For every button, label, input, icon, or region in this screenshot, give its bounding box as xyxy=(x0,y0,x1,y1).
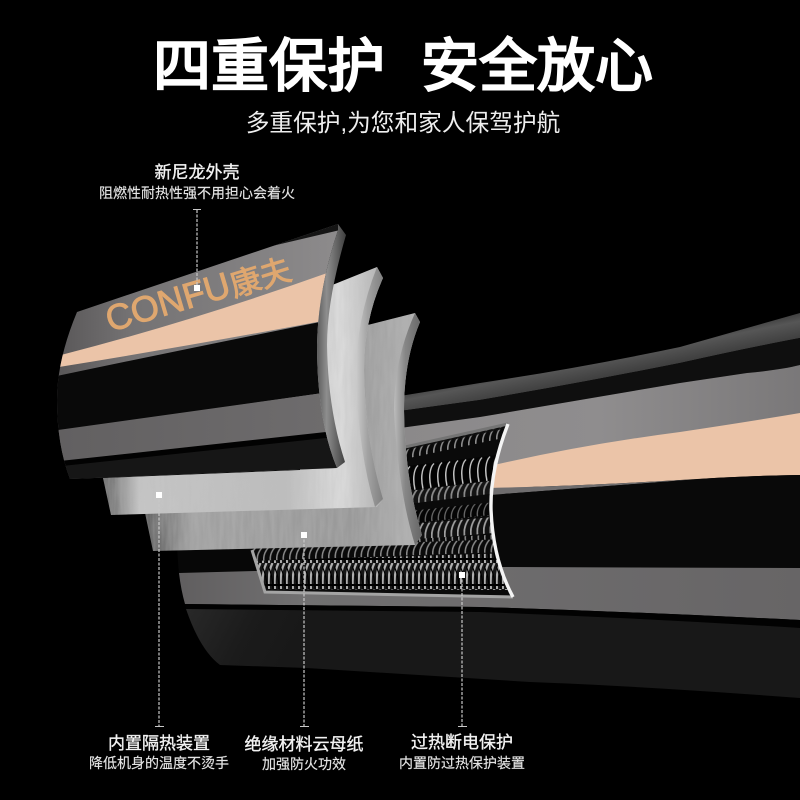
title: 四重保护 xyxy=(153,34,385,99)
body: thin black band xyxy=(185,604,800,628)
body: grey band xyxy=(400,365,800,520)
title xyxy=(153,34,653,99)
brand logo xyxy=(101,252,295,340)
title: 安全放心 xyxy=(421,34,653,99)
callout: mica paper xyxy=(244,532,364,772)
shell: black band xyxy=(50,320,330,432)
shell: peach stripe xyxy=(50,272,330,369)
body: lower grey band xyxy=(179,567,800,620)
callout: heat insulation: 降低机身的温度不烫手 xyxy=(89,755,229,771)
nylon outer shell xyxy=(50,220,350,490)
label: 内置隔热装置 xyxy=(108,734,210,753)
callout: nylon shell: 阻燃性耐热性强不用担心会着火 xyxy=(99,185,295,201)
layer: heat insulation device xyxy=(103,267,383,515)
body: lower dark section xyxy=(186,609,800,698)
insulation rim xyxy=(356,267,383,507)
coil white edge xyxy=(491,424,513,597)
callout: mica paper: 加强防火功效 xyxy=(262,756,346,772)
hair dryer body xyxy=(177,313,800,698)
callout: heat insulation xyxy=(89,492,229,771)
callout: overheat protection xyxy=(399,572,525,771)
body: black band xyxy=(400,338,800,428)
body: main black band xyxy=(400,475,800,570)
mica rim xyxy=(394,313,422,545)
callout: nylon shell xyxy=(99,163,295,291)
shell: thin black band xyxy=(60,431,335,466)
body: thin grey strip xyxy=(490,479,700,495)
coil rows upper xyxy=(406,426,502,458)
brand logo: CONFU xyxy=(101,264,235,340)
shell: grey band xyxy=(58,394,326,460)
coil top rim xyxy=(405,424,508,447)
coil window frame xyxy=(252,424,513,597)
body: top dark band xyxy=(400,313,800,411)
label: 新尼龙外壳 xyxy=(154,163,240,182)
subtitle: 多重保护,为您和家人保驾护航 xyxy=(246,110,560,137)
body: lower left black band xyxy=(177,540,420,575)
layer: mica insulation paper xyxy=(145,313,422,551)
shell: top grey xyxy=(57,224,338,479)
shell: top dark edge xyxy=(275,224,338,246)
shell rim xyxy=(317,224,346,468)
heating coil xyxy=(250,424,515,597)
coil bottom rim xyxy=(252,550,513,597)
label: 过热断电保护 xyxy=(411,733,513,752)
shell: lower dark band xyxy=(66,438,337,479)
brand logo: 康夫 xyxy=(226,252,295,304)
coil rows lower xyxy=(250,534,505,561)
label: 绝缘材料云母纸 xyxy=(244,735,364,754)
callout: overheat protection: 内置防过热保护装置 xyxy=(399,755,525,771)
body: peach band xyxy=(490,413,800,488)
